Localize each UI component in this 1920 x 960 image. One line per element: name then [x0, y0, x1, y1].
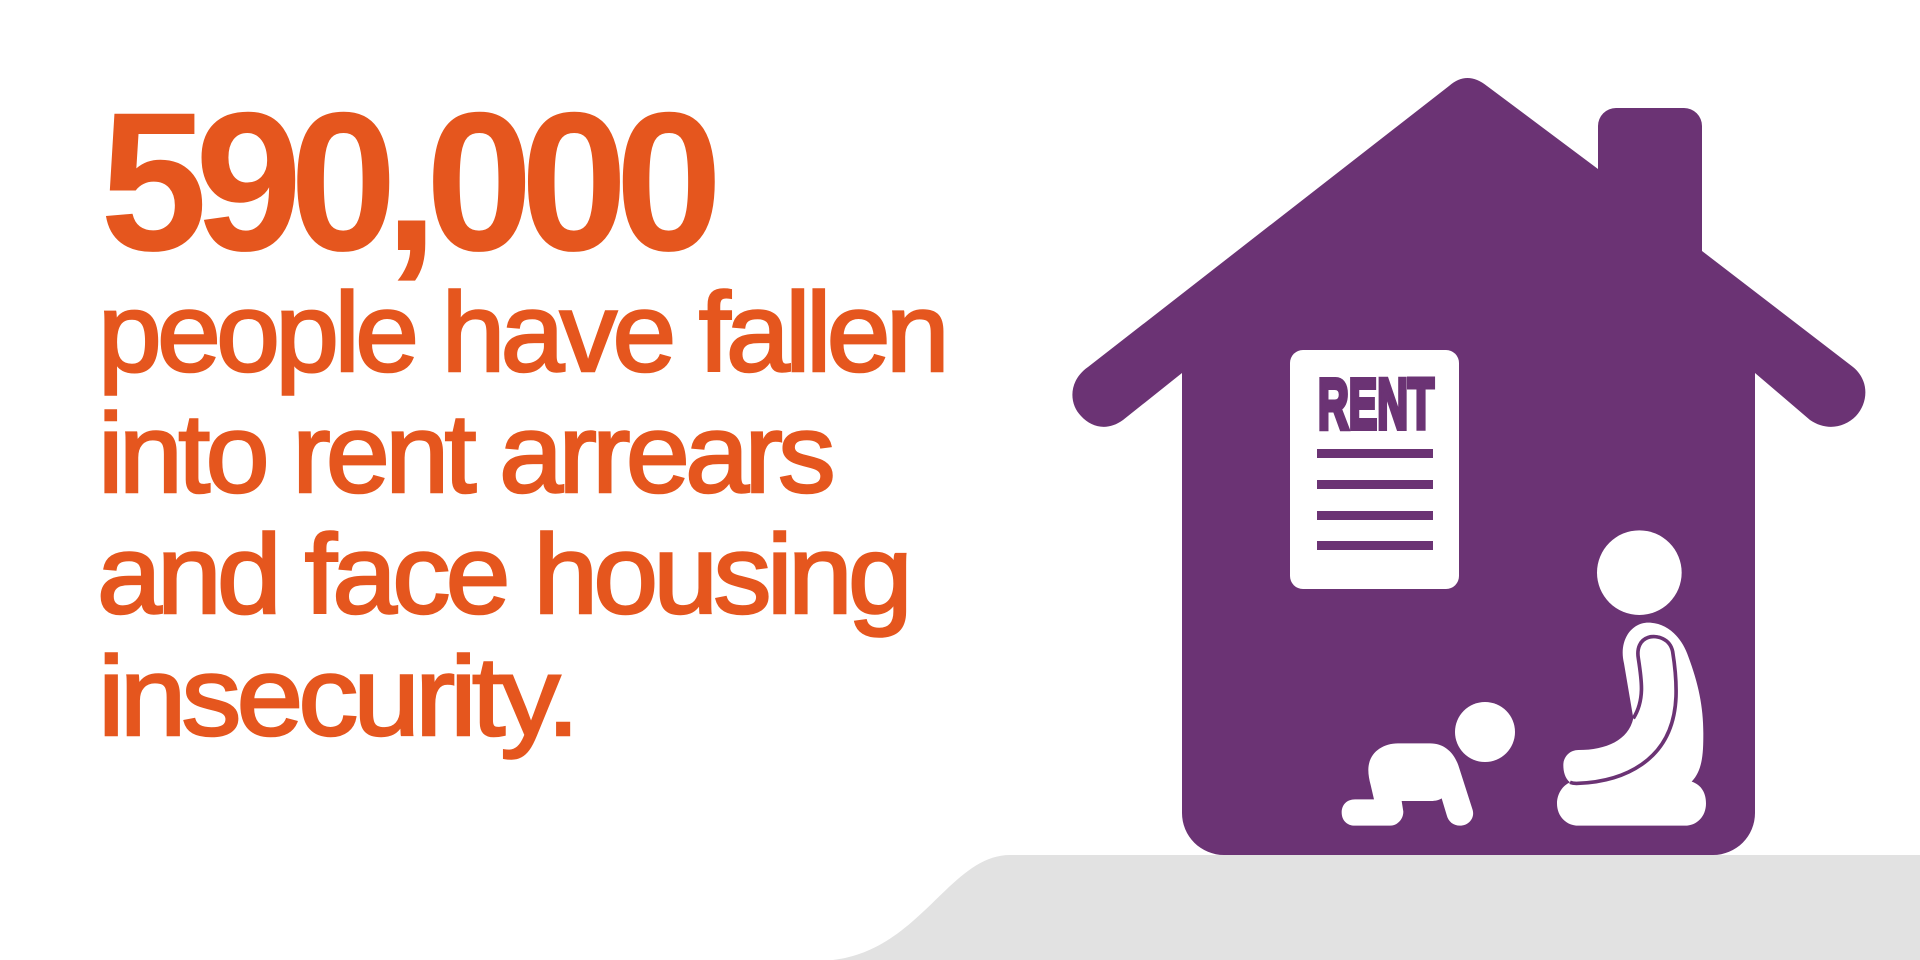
icon: purple house: [1072, 78, 1865, 855]
icon: crawling baby: [1342, 702, 1515, 826]
body text line 2: into rent arrears: [98, 391, 832, 516]
adult head: [1597, 530, 1682, 615]
document heading: RENT: [1318, 366, 1434, 444]
document sheet: [1290, 350, 1459, 589]
text block: statistic: [97, 71, 945, 759]
icon: rent document: [1290, 350, 1459, 589]
headline number: 590,000: [100, 71, 715, 292]
adult arm outline: [1570, 637, 1676, 783]
baby head: [1455, 702, 1515, 762]
icon: seated adult: [1557, 530, 1706, 826]
document text lines: [1317, 449, 1433, 550]
body text line 4: insecurity.: [98, 634, 575, 759]
body text line 3: and face housing: [97, 512, 908, 637]
body text line 1: people have fallen: [98, 270, 945, 395]
grey ground hill: [833, 855, 1920, 960]
adult body: [1557, 623, 1706, 826]
baby body: [1342, 743, 1473, 826]
